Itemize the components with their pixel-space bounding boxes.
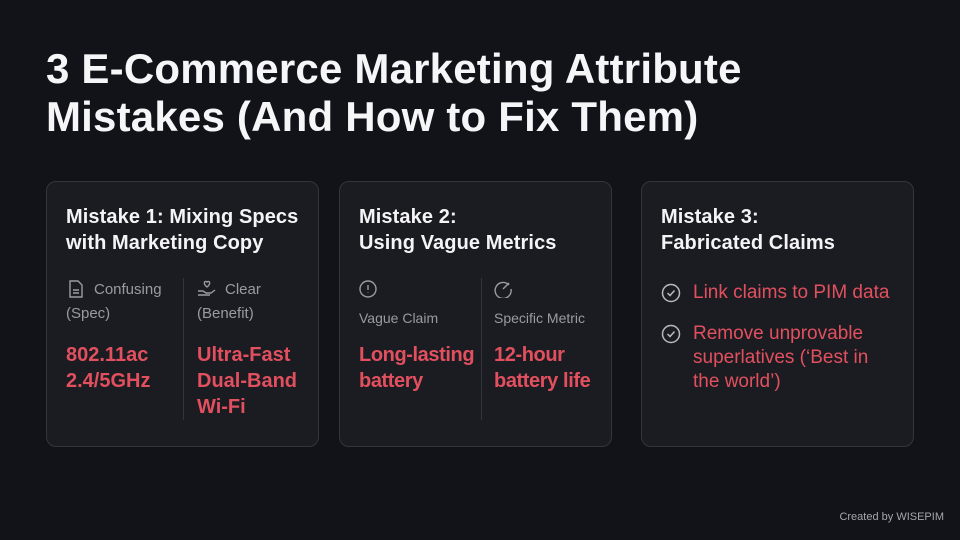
column: specific metric: battery life (494, 370, 590, 392)
checklist item 2: Remove unprovable (693, 323, 863, 344)
heading: mistake 3: Mistake 3: (661, 206, 759, 228)
heading: mistake 1: with Marketing Copy (66, 232, 263, 254)
icon: hand heart (198, 280, 216, 296)
column: confusing spec: 802.11ac (66, 344, 148, 366)
checklist item 2: superlatives (‘Best in (693, 347, 868, 368)
column: specific metric: Specific Metric (494, 310, 585, 326)
column: vague claim: Long-lasting (359, 344, 474, 366)
checklist item 2: the world’) (693, 371, 781, 392)
heading: mistake 2 (359, 206, 557, 254)
column: specific metric (494, 282, 590, 392)
heading: mistake 2: Mistake 2: (359, 206, 457, 228)
column: clear benefit: Clear (225, 281, 261, 298)
column: vague claim: battery (359, 370, 423, 392)
column: clear benefit (197, 280, 297, 418)
footer credit: Created by WISEPIM (839, 511, 944, 523)
column: confusing spec: (Spec) (66, 305, 110, 322)
column: specific metric: 12-hour (494, 344, 565, 366)
column: confusing spec: 2.4/5GHz (66, 370, 150, 392)
column: clear benefit: (Benefit) (197, 305, 254, 322)
panel: mistake 2 (339, 181, 612, 447)
title (46, 45, 742, 140)
panel: mistake 1 (46, 181, 319, 447)
panel: mistake 3 (641, 181, 914, 447)
title: 3 E-Commerce Marketing Attribute (46, 45, 742, 92)
column: clear benefit: Ultra-Fast (197, 344, 290, 366)
column: confusing spec (66, 280, 162, 392)
column: clear benefit: Dual-Band (197, 370, 297, 392)
icon: alert (359, 280, 377, 298)
heading: mistake 3: Fabricated Claims (661, 232, 835, 254)
checklist item 2 (662, 323, 868, 392)
icon: gauge (494, 282, 512, 298)
heading: mistake 3 (661, 206, 835, 254)
heading: mistake 2: Using Vague Metrics (359, 232, 557, 254)
column: vague claim (359, 280, 474, 392)
heading: mistake 1: Mistake 1: Mixing Specs (66, 206, 298, 228)
column: confusing spec: Confusing (94, 281, 162, 298)
heading: mistake 1 (66, 206, 298, 254)
checklist item 1: Link claims to PIM data (693, 282, 889, 303)
column: clear benefit: Wi-Fi (197, 396, 246, 418)
title: Mistakes (And How to Fix Them) (46, 93, 698, 140)
column: vague claim: Vague Claim (359, 310, 438, 326)
icon: document (69, 280, 83, 298)
